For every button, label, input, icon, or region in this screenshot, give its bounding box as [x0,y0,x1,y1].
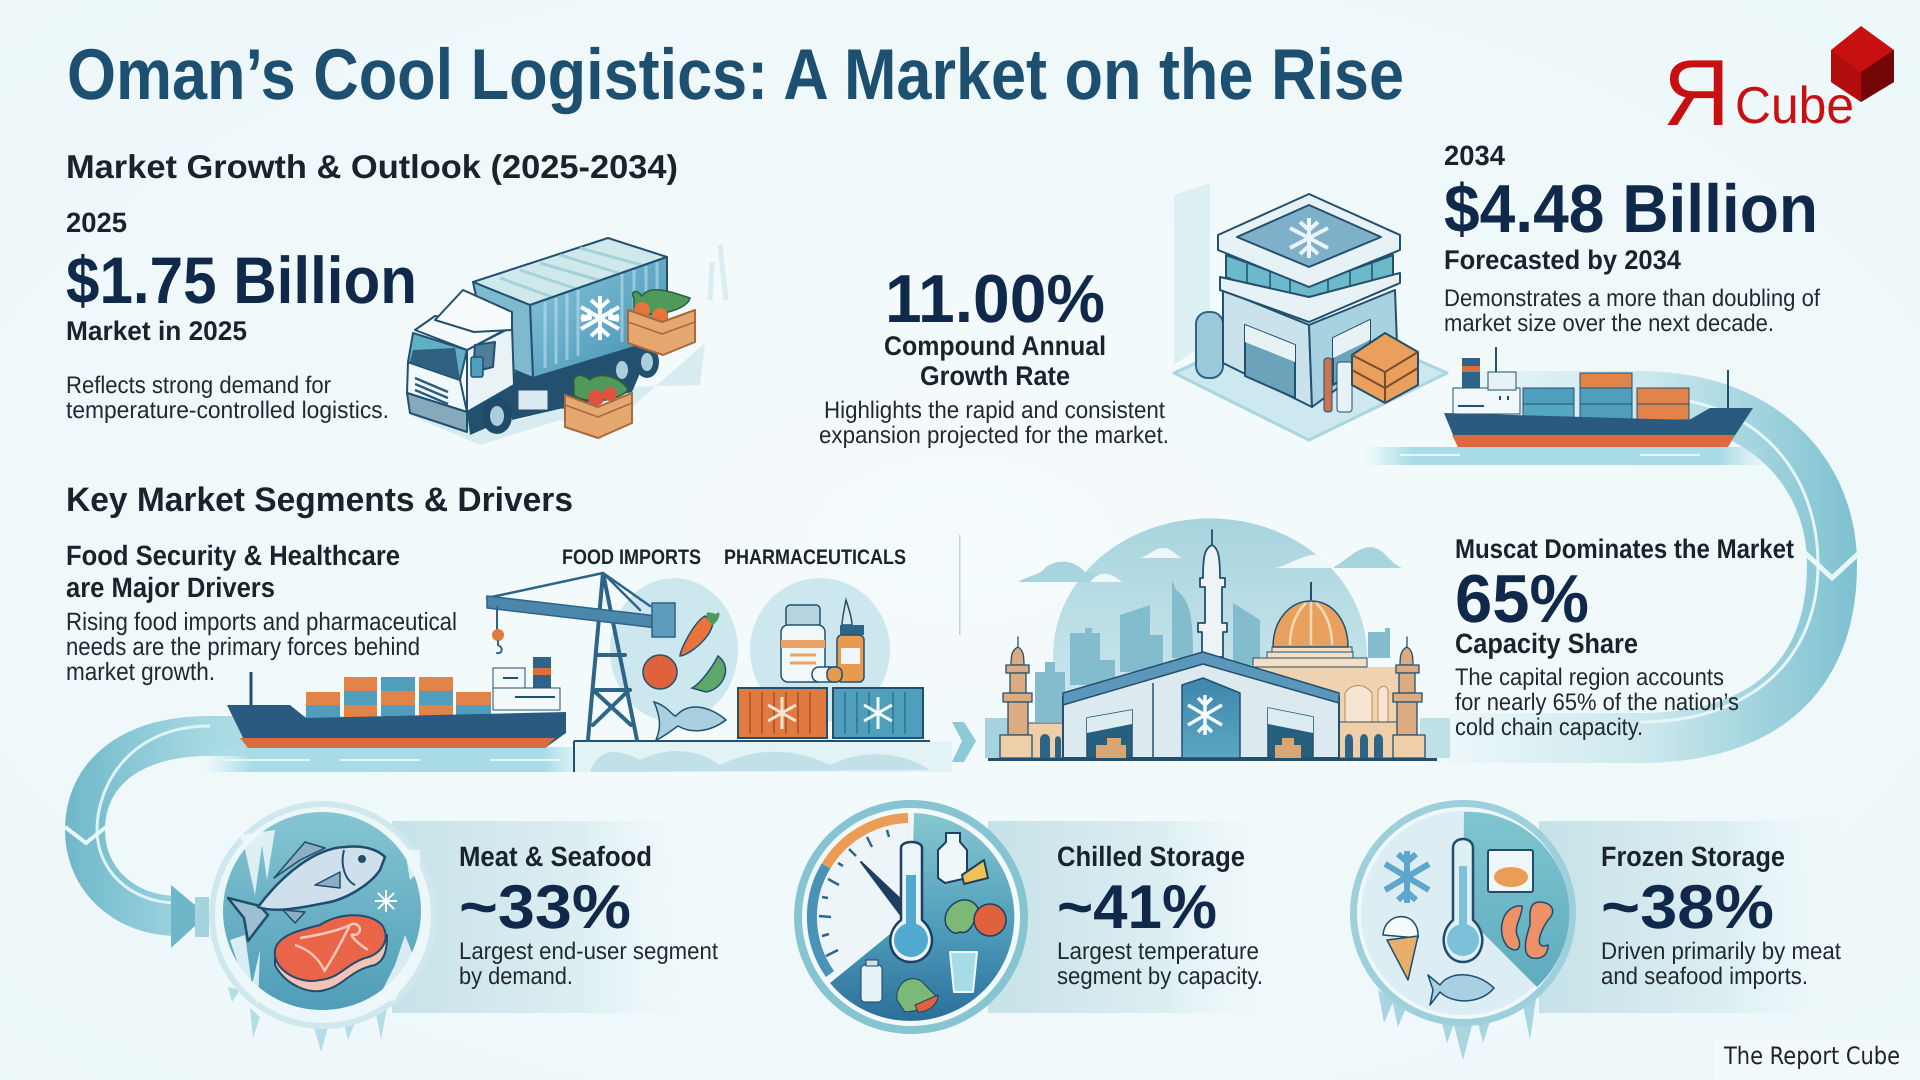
logo: RCube: Cube [1735,77,1854,135]
icon: port water and dock [205,741,952,772]
stat: 41 percent: ~41% [1057,873,1217,942]
icon: pharmaceuticals bubble [750,578,890,722]
description line 2: by demand. [459,963,573,990]
panel: chilled storage [988,821,1278,1013]
icon: shipping containers [738,688,923,738]
stat: 38 percent: ~38% [1601,873,1774,942]
stat: 2034 forecast: Forecasted by 2034 [1444,245,1681,275]
logo: RCube: Я [1663,40,1730,145]
stat: 33 percent: ~33% [459,873,631,942]
description: meat and seafood: Largest end-user segment [459,938,718,965]
description line 2: segment by capacity. [1057,963,1263,990]
stat: CAGR: Highlights the rapid and consistent [824,397,1165,424]
heading: chilled storage: Chilled Storage [1057,841,1245,872]
description: chilled storage: Largest temperature [1057,938,1259,965]
text block: food security and healthcare drivers: needs are the primary forces behind [66,633,420,661]
icon: food imports bubble [610,578,738,740]
logo: RCube [1663,26,1894,145]
heading: meat and seafood: Meat & Seafood [459,841,652,872]
text block: food security and healthcare drivers: Rising food imports and pharmaceutical [66,608,457,636]
icon: meat and seafood circle [212,804,434,1052]
text block: food security and healthcare drivers [66,540,457,686]
watermark: the report cube: The Report Cube [1723,1042,1900,1070]
icon: muscat skyline and warehouse [985,518,1450,761]
stat: 2025 market: Reflects strong demand for [66,372,331,399]
description line 2: and seafood imports. [1601,963,1808,990]
stat: 2034 forecast: Demonstrates a more than doubling of [1444,285,1820,312]
divider line [959,535,960,635]
stat: muscat capacity share: 65% [1455,561,1589,637]
stat: 2025 market: Market in 2025 [66,316,247,346]
icon: chilled storage gauge [794,800,1028,1034]
stat: muscat capacity share: for nearly 65% of the nation’s [1455,689,1739,716]
text block: food security and healthcare drivers: market growth. [66,658,215,686]
ribbon arrow: lower left curve [65,722,976,948]
icon: port crane [487,573,675,740]
stat: CAGR: 11.00% [885,261,1105,337]
stat: 2034 forecast: market size over the next decade. [1444,310,1774,337]
title: Oman’s Cool Logistics: A Market on the Rise [67,35,1404,115]
heading: frozen storage: Frozen Storage [1601,841,1785,872]
stat: muscat capacity share: Capacity Share [1455,628,1638,659]
stat: CAGR: expansion projected for the market. [819,422,1169,449]
icon: lower container ship [227,657,566,748]
panel: frozen storage [1539,821,1849,1013]
description: frozen storage: Driven primarily by meat [1601,938,1841,965]
stat: muscat capacity share: Muscat Dominates the Market [1455,534,1794,564]
text block: food security and healthcare drivers: Food Security & Healthcare [66,540,400,571]
stat: 2025 market: temperature-controlled logistics. [66,397,389,424]
section heading: key segments: Key Market Segments & Drivers [66,481,573,519]
stat: 2034 forecast: 2034 [1444,140,1505,171]
icon: frozen storage circle [1350,800,1576,1060]
ribbon arrow: top right curve [1400,396,1860,738]
stat: 2025 market: $1.75 Billion [66,243,417,317]
stat: muscat capacity share: The capital region accounts [1455,664,1724,691]
stat: 2034 forecast: $4.48 Billion [1444,171,1818,247]
stat: muscat capacity share: cold chain capacity. [1455,714,1643,741]
stat: 2034 forecast [1444,140,1820,337]
icon: top container ship [1364,347,1768,465]
label: food imports: FOOD IMPORTS [562,546,701,569]
icon: refrigerated truck [407,238,726,445]
stat: CAGR: Growth Rate [920,361,1070,391]
stat: muscat capacity share [1455,534,1794,741]
stat: 2025 market: 2025 [66,207,127,238]
stat: CAGR [819,261,1169,449]
icon: cold storage building [1174,183,1447,440]
stat: CAGR: Compound Annual [884,331,1106,361]
text block: food security and healthcare drivers: are Major Drivers [66,572,275,603]
section heading: market growth: Market Growth & Outlook (2025-2034) [66,148,678,185]
watermark: the report cube [1715,1040,1920,1080]
panel: meat and seafood [392,821,718,1013]
stat: 2025 market [66,207,417,424]
label: pharmaceuticals: PHARMACEUTICALS [724,546,906,569]
